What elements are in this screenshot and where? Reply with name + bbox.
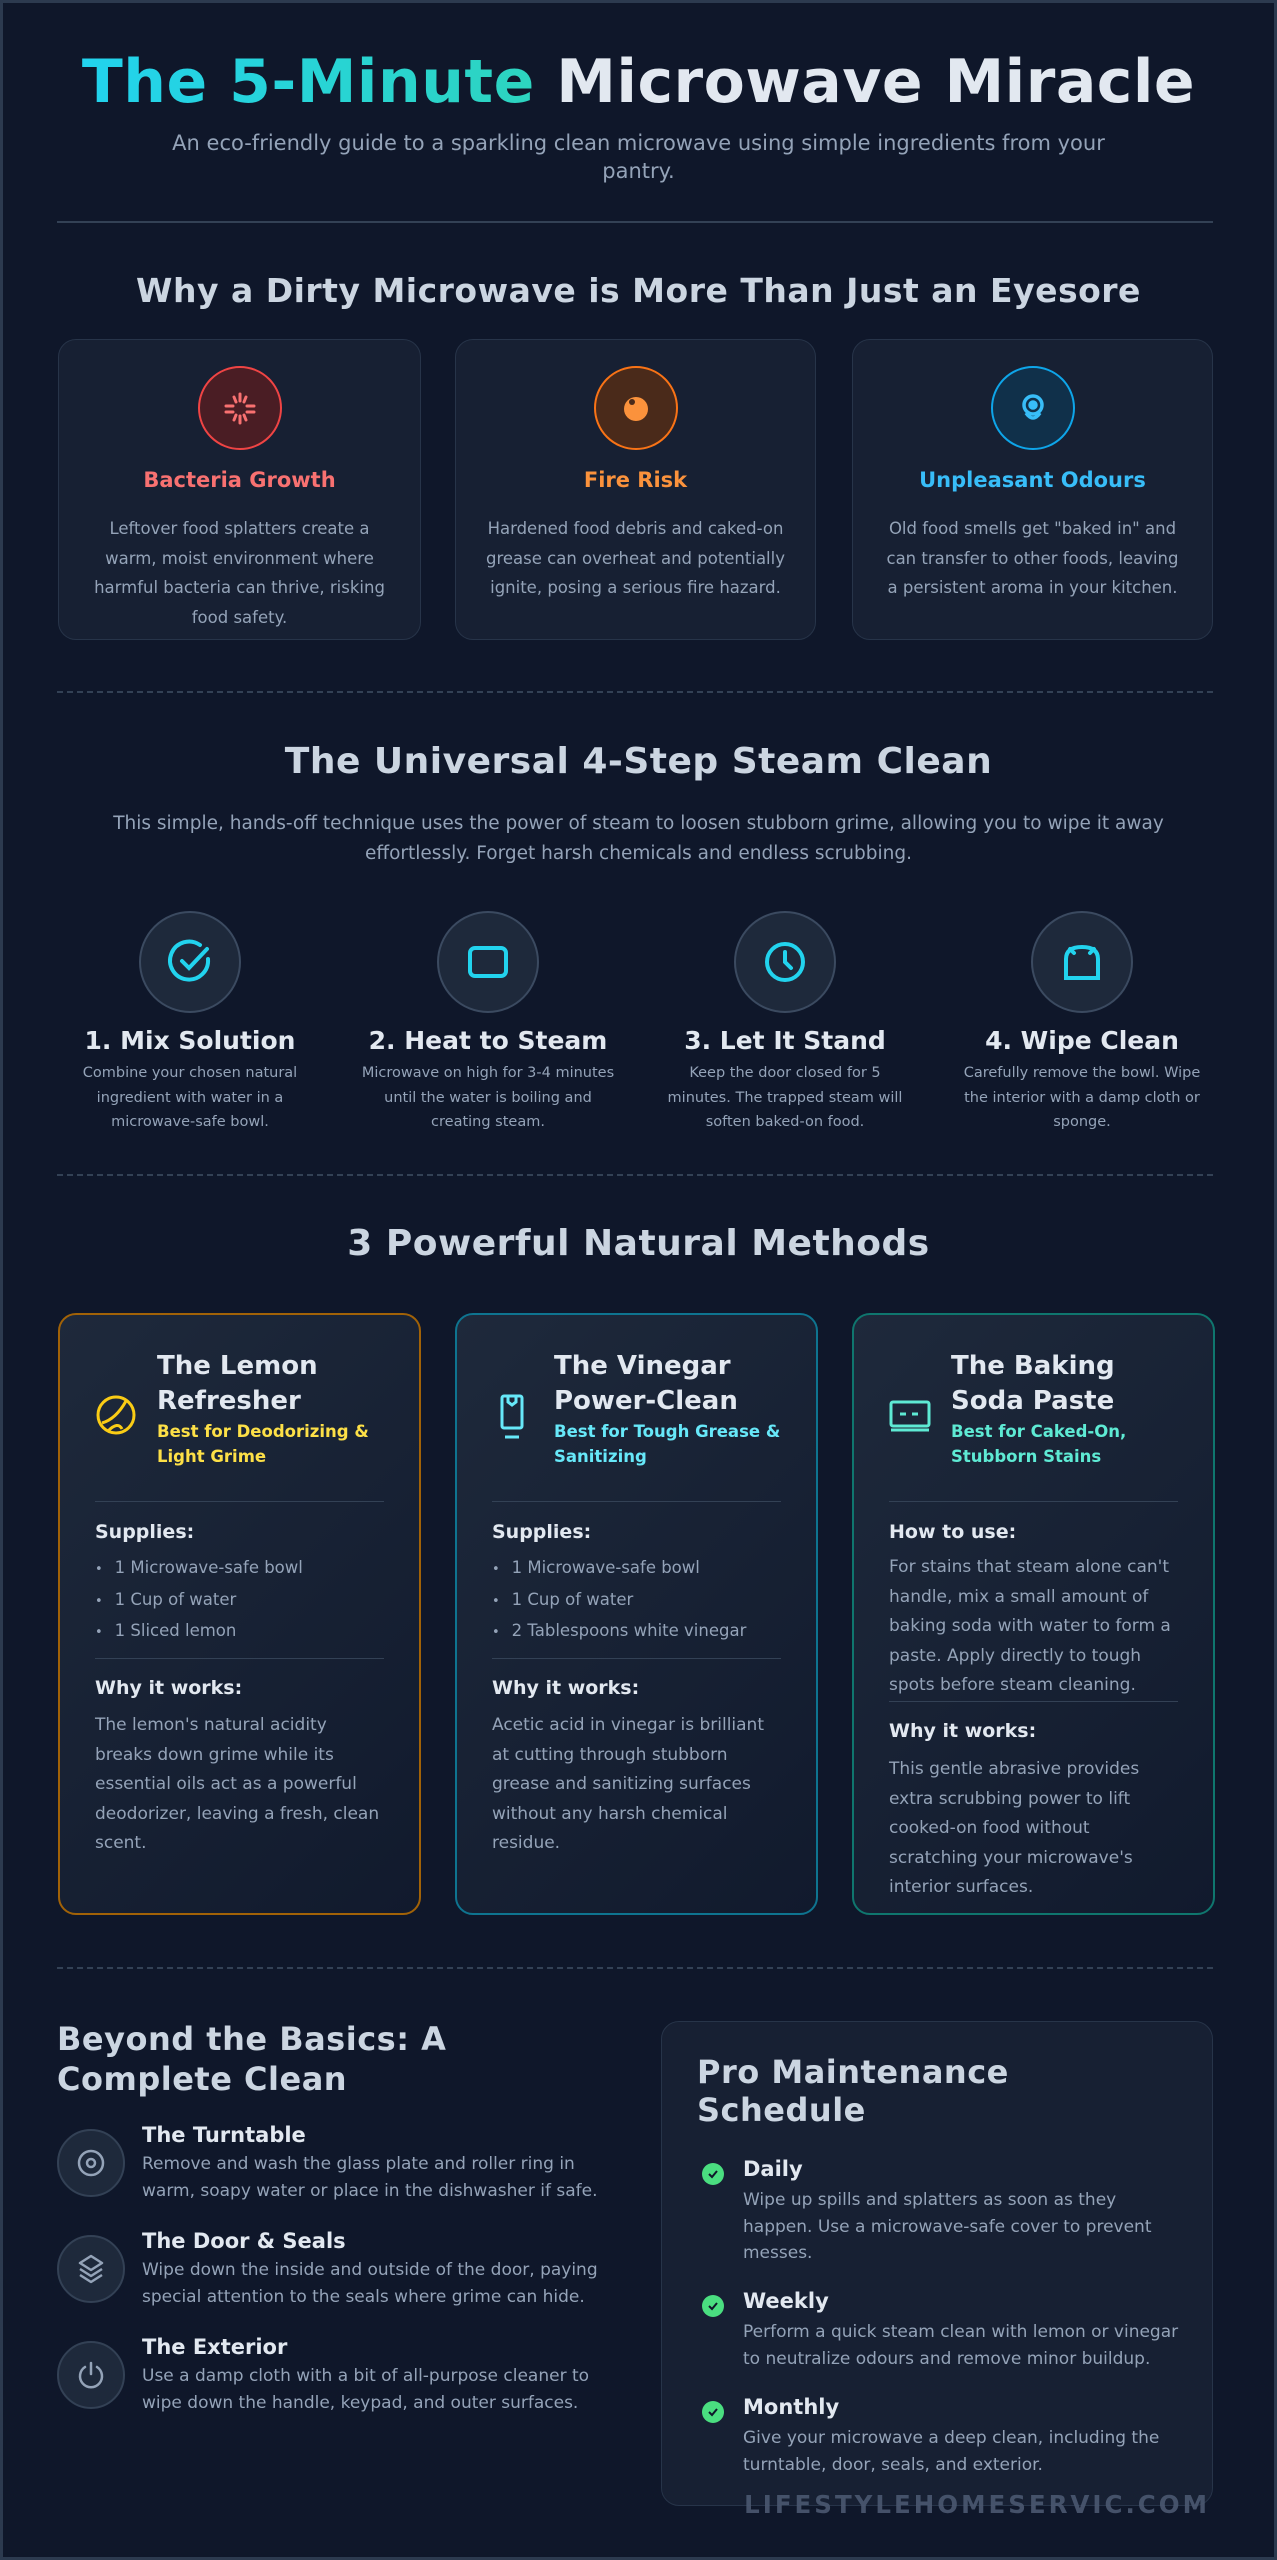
panel: baking soda: This gentle abrasive provides extra scrubbing power to lift cooked-on food without scratching your microwave's interior surfaces. [889,1759,1139,1897]
heading: schedule [697,2053,1009,2129]
step 3: 3. Let It Stand [684,1026,886,1055]
icon: check [139,911,241,1013]
icon: sponge [1031,911,1133,1013]
panel: baking soda: Best for Caked-On, Stubborn Stains [951,1422,1126,1466]
text: Wipe up spills and splatters as soon as they happen. Use a microwave-safe cover to prevent messes. [743,2190,1152,2263]
panel: vinegar: Why it works: [492,1677,639,1699]
panel: baking soda: How to use: [889,1521,1016,1543]
item: turntable [57,2123,597,2201]
text: Wipe down the inside and outside of the door, paying special attention to the seals where grime can hide. [142,2260,598,2307]
panel: baking soda [852,1313,1215,1915]
panel: vinegar: 1 Cup of water [512,1590,633,1608]
heading: beyond basics: Complete Clean [57,2060,347,2098]
panel: lemon: Refresher [157,1386,301,1416]
step 1: Combine your chosen natural ingredient with water in a microwave-safe bowl. [83,1065,297,1130]
panel: fire [455,339,816,640]
icon: odour [990,366,1074,450]
icon: microwave [437,911,539,1013]
schedule: weekly [702,2289,1178,2368]
step 3: Keep the door closed for 5 minutes. The trapped steam will soften baked-on food. [668,1065,902,1130]
panel: lemon [58,1313,421,1915]
text: The Door & Seals [142,2229,346,2253]
step 1 [83,911,297,1130]
icon: clock [734,911,836,1013]
text: Give your microwave a deep clean, including the turntable, door, seals, and exterior. [743,2428,1159,2474]
text: The Turntable [142,2123,306,2147]
heading: why dirty: Why a Dirty Microwave is More Than Just an Eyesore [136,271,1141,310]
panel: vinegar: 2 Tablespoons white vinegar [512,1621,746,1640]
panel: lemon: The Lemon [157,1351,318,1381]
panel: maintenance schedule [661,2021,1213,2506]
intro text: This simple, hands-off technique uses the power of steam to loosen stubborn grime, allowing you to wipe it away effortlessly. Forget harsh chemicals and endless scrubbing. [113,813,1164,864]
panel: lemon: The lemon's natural acidity breaks down grime while its essential oils act as a powerful deodorizer, leaving a fresh, clean scent. [95,1715,379,1853]
text: Daily [743,2157,803,2181]
heading: methods: 3 Powerful Natural Methods [347,1223,930,1264]
icon: bottle [500,1394,524,1438]
text: Remove and wash the glass plate and roller ring in warm, soapy water or place in the dishwasher if safe. [142,2154,597,2201]
step 4: 4. Wipe Clean [985,1026,1179,1055]
panel: lemon: Best for Deodorizing & Light Grime [157,1422,369,1466]
panel: vinegar: The Vinegar [554,1351,731,1381]
icon: bacteria [198,366,282,450]
step 2: 2. Heat to Steam [369,1026,607,1055]
step 4: Carefully remove the bowl. Wipe the interior with a damp cloth or sponge. [964,1065,1200,1130]
step 1: 1. Mix Solution [85,1026,295,1055]
panel: vinegar: 1 Microwave-safe bowl [512,1558,700,1577]
panel: lemon: 1 Cup of water [115,1590,236,1608]
heading: beyond basics: Beyond the Basics: A [57,2020,446,2058]
panel: vinegar: Power-Clean [554,1386,738,1416]
panel: lemon: Why it works: [95,1677,242,1699]
panel: fire: Hardened food debris and caked-on grease can overheat and potentially ignite, posing a serious fire hazard. [486,519,785,597]
panel: vinegar: Acetic acid in vinegar is brilliant at cutting through stubborn grease and sanitizing surfaces without any harsh chemical residue. [492,1715,764,1853]
step 4 [964,911,1200,1130]
icon: lemon [96,1396,136,1434]
item: exterior [57,2335,589,2413]
panel: lemon: 1 Microwave-safe bowl [115,1558,303,1577]
icon: box [890,1400,930,1432]
watermark: LIFESTYLEHOMESERVIC.COM [744,2490,1210,2519]
heading: schedule: Pro Maintenance [697,2053,1009,2091]
panel: lemon: 1 Sliced lemon [115,1621,236,1640]
panel: fire: Fire Risk [584,468,687,492]
panel: odours [852,339,1213,640]
panel: baking soda: Why it works: [889,1720,1036,1742]
step 2 [362,911,614,1130]
step 3 [668,911,902,1130]
panel: baking soda: Soda Paste [951,1386,1114,1416]
panel: baking soda: For stains that steam alone can't handle, mix a small amount of baking soda with water to form a paste. Apply directly to tough spots before steam cleaning. [889,1557,1171,1695]
panel: odours: Unpleasant Odours [919,468,1146,492]
panel: bacteria: Leftover food splatters create a warm, moist environment where harmful bacteria can thrive, risking food safety. [94,519,385,626]
text: Weekly [743,2289,829,2313]
subtitle: An eco-friendly guide to a sparkling clean microwave using simple ingredients from your pantry. [172,131,1105,183]
panel: vinegar [455,1313,818,1915]
schedule: daily [702,2157,1152,2263]
panel: vinegar: Best for Tough Grease & Sanitizing [554,1422,780,1466]
panel: odours: Old food smells get "baked in" and can transfer to other foods, leaving a persistent aroma in your kitchen. [886,519,1178,597]
text: Perform a quick steam clean with lemon or vinegar to neutralize odours and remove minor buildup. [743,2322,1178,2368]
panel: bacteria: Bacteria Growth [143,468,336,492]
text: Monthly [743,2395,839,2419]
title: The 5-Minute Microwave Miracle [82,47,1195,117]
text: Use a damp cloth with a bit of all-purpose cleaner to wipe down the handle, keypad, and outer surfaces. [142,2366,589,2413]
step 2: Microwave on high for 3-4 minutes until the water is boiling and creating steam. [362,1065,614,1130]
item: door [57,2229,598,2307]
icon: layers [57,2235,125,2303]
panel: bacteria [58,339,421,640]
panel: lemon: Supplies: [95,1521,194,1543]
heading: steam clean: The Universal 4-Step Steam Clean [285,741,992,782]
heading: beyond basics [57,2020,446,2098]
text: The Exterior [142,2335,287,2359]
icon: power [57,2341,125,2409]
panel: vinegar: Supplies: [492,1521,591,1543]
icon: turntable [57,2129,125,2197]
icon: fire [594,366,678,450]
panel: baking soda: The Baking [951,1351,1115,1381]
heading: schedule: Schedule [697,2091,866,2129]
schedule: monthly [702,2395,1159,2474]
